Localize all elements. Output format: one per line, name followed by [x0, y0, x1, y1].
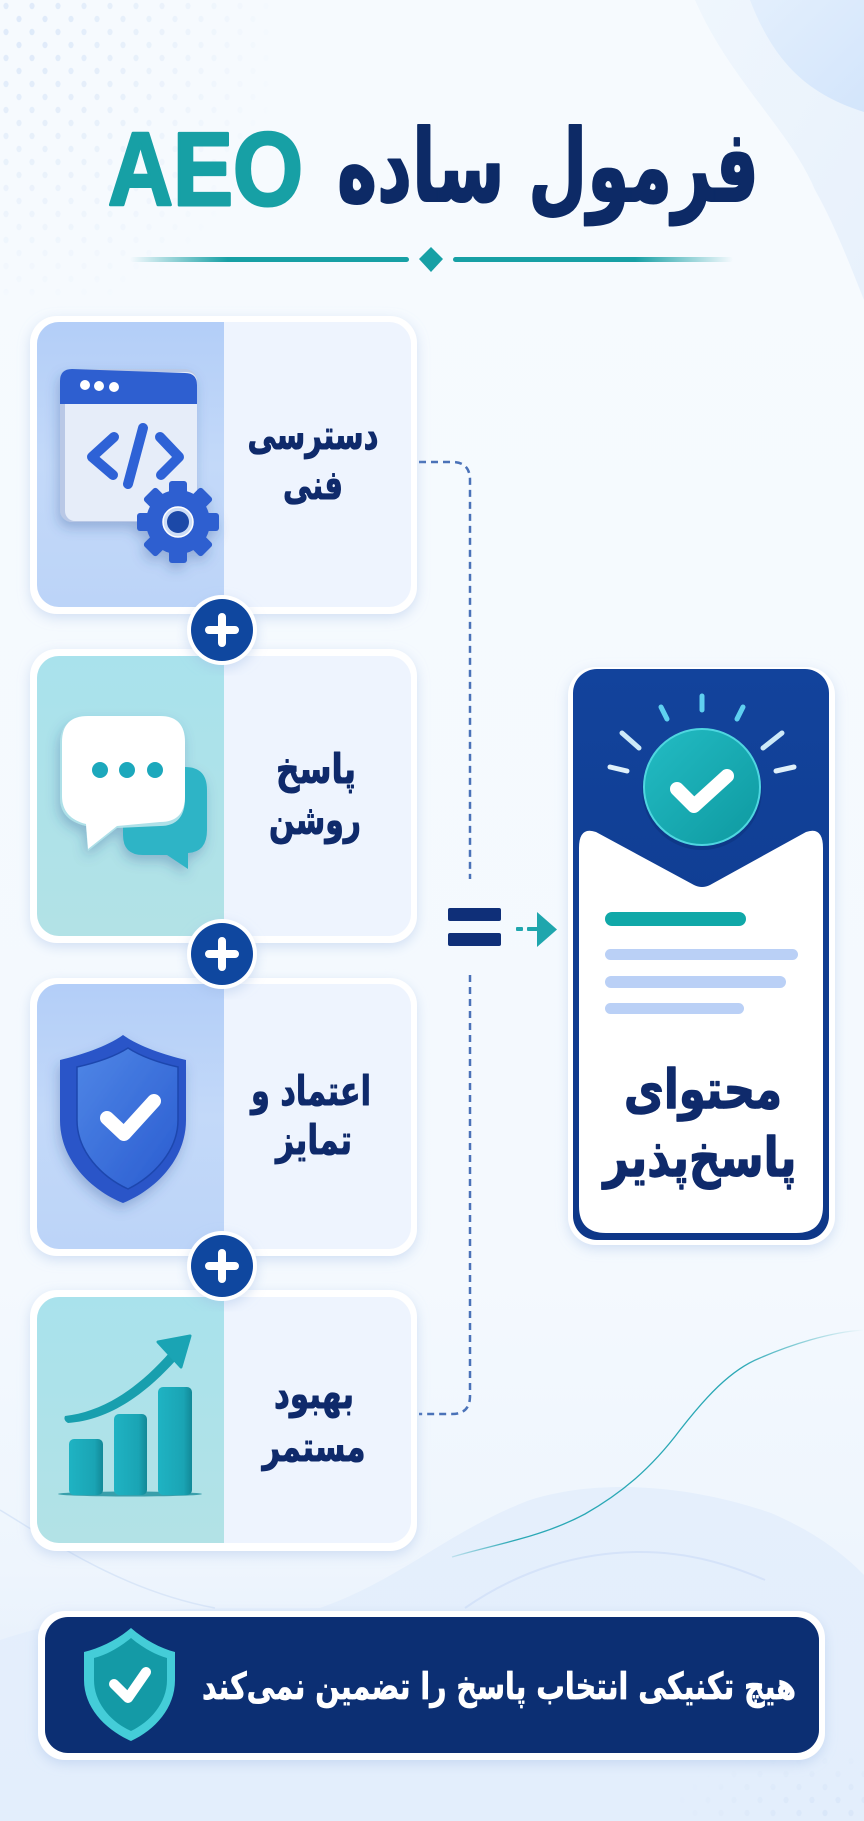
content lines	[605, 912, 798, 1014]
dashed connector	[419, 462, 470, 1414]
title latin part AEO: AEO	[108, 112, 303, 228]
icon: chat bubbles	[60, 716, 207, 869]
label: answerable content	[601, 1058, 796, 1189]
title	[108, 108, 759, 228]
label: clear answer	[269, 745, 361, 845]
label: answerable content: محتوای	[624, 1058, 782, 1121]
label: technical access	[248, 411, 378, 509]
label: technical access: دسترسی	[248, 411, 378, 459]
icon: burst rays	[610, 696, 794, 771]
label: clear answer: پاسخ	[276, 745, 356, 794]
plus sign 1	[187, 595, 257, 665]
label: answerable content: پاسخ‌پذیر	[601, 1126, 796, 1189]
label: continuous improvement: بهبود	[274, 1370, 354, 1418]
icon: teal shield	[84, 1628, 175, 1741]
title divider	[130, 247, 733, 272]
icon: check badge	[642, 729, 762, 850]
icon: rising bar chart	[58, 1336, 202, 1496]
label: continuous improvement	[261, 1370, 366, 1471]
bottom banner	[38, 1611, 825, 1760]
icon: code window with gear	[60, 369, 219, 563]
label: technical access: فنی	[283, 461, 343, 509]
panel: continuous improvement	[30, 1290, 417, 1551]
equals sign	[448, 908, 501, 946]
plus sign 3	[187, 1231, 257, 1301]
panel: clear answer	[30, 649, 417, 943]
label: continuous improvement: مستمر	[261, 1423, 366, 1471]
panel: trust and differentiation	[30, 978, 417, 1256]
label: trust and differentiation: تمایز	[274, 1116, 352, 1164]
icon: shield with check	[60, 1035, 186, 1203]
arrow to result	[516, 912, 557, 947]
label: trust and differentiation	[250, 1067, 371, 1164]
panel: answerable content result	[568, 667, 835, 1245]
plus sign 2	[187, 919, 257, 989]
panel: technical access	[30, 316, 417, 614]
label: trust and differentiation: اعتماد و	[250, 1067, 371, 1116]
label: clear answer: روشن	[269, 796, 361, 845]
